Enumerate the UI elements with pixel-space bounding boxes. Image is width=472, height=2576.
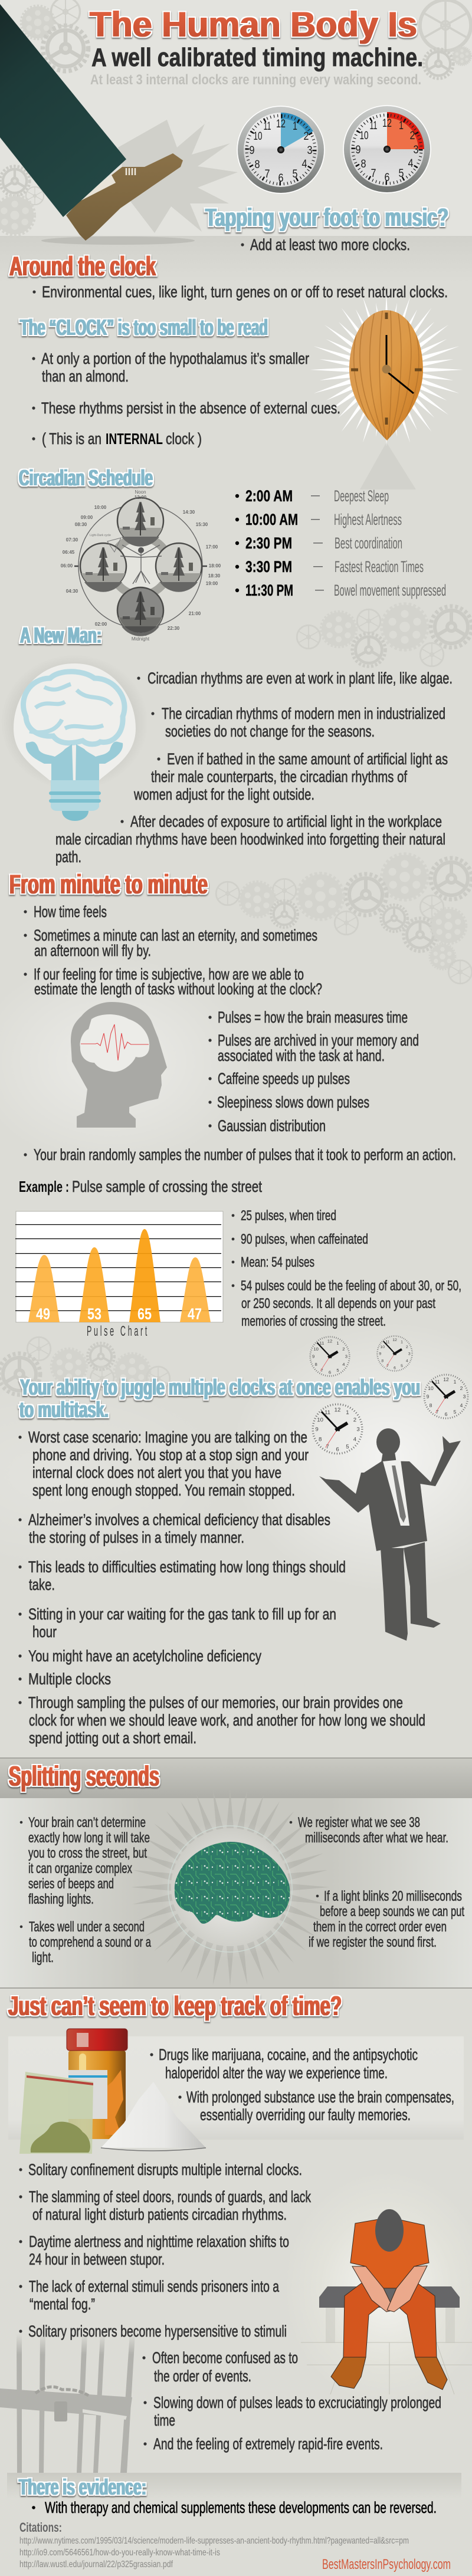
text: subjective time: If our feeling for time is subjective, how are we able to [34, 965, 304, 983]
illustration: brain light bulb [1, 655, 148, 821]
clock: blue two-hour dial: 4 [302, 158, 307, 170]
text: brain cant determine: series of beeps and [28, 1876, 114, 1892]
chart: pulse chart: 47 [188, 1305, 202, 1323]
text: worst case scenario: spent long enough stopped. You remain stopped. [32, 1481, 295, 1499]
list: circadian times [235, 487, 446, 599]
list: pulse stats [232, 1208, 461, 1329]
text: internal clock: INTERNAL [106, 430, 163, 448]
small clock 4: 10 [317, 1417, 323, 1424]
small clock 4 [313, 1404, 362, 1454]
chart: circadian diagram: 09:00 [81, 515, 93, 520]
text: alzheimers [18, 1511, 330, 1546]
text: hypothalamus: At only a portion of the hypothalamus it’s smaller [41, 350, 309, 367]
small clock 4: 12 [335, 1407, 340, 1414]
almond clock with rays [310, 293, 463, 489]
chart: circadian diagram: 15:30 [196, 522, 208, 527]
small clock 4: 2 [353, 1417, 356, 1424]
text: confused order: Often become confused as to [152, 2349, 298, 2367]
list: pulses [208, 1008, 419, 1135]
small clock 2: 10 [380, 1345, 385, 1349]
small clock 2: 11 [385, 1340, 390, 1344]
heading: juggle multiple clocks [19, 1375, 420, 1422]
text: sometimes a minute: Sometimes a minute can last an eternity, and sometimes [34, 926, 317, 944]
text: under a second: to comprehend a sound or a [29, 1934, 151, 1950]
heading: clock too small: The “CLOCK” is too small to be read [20, 316, 268, 340]
text: difficulties: take. [29, 1576, 55, 1593]
text: brain cant determine: you to cross the street, but [28, 1845, 147, 1861]
chart: circadian diagram [61, 489, 221, 642]
text: workplace exposure: path. [55, 848, 81, 866]
clock: blue two-hour dial: 1 [293, 120, 297, 133]
text: subjective time [24, 965, 322, 998]
small clock 2: 1 [401, 1340, 403, 1344]
text: artificial light [133, 750, 448, 803]
heading: around the clock: Around the clock [9, 251, 156, 281]
heading: there is evidence: There is evidence: [19, 2475, 146, 2500]
small clock 1: 5 [336, 1368, 339, 1373]
panel: drugs [8, 2036, 464, 2140]
list: pulses: Sleepiness slows down pulses [217, 1093, 369, 1111]
text: gas tank: Sitting in your car waiting for the gas tank to fill up for an [28, 1605, 336, 1623]
chart: circadian diagram: 00:00 [135, 632, 148, 637]
chart: circadian diagram: 07:30 [66, 537, 78, 543]
text: artificial light: women adjust for the light outside. [133, 786, 314, 803]
text: sometimes a minute [24, 926, 317, 960]
text: solitary confinement: Solitary confinement disrupts multiple internal clocks. [28, 2161, 302, 2179]
text: hypersensitive: Solitary prisoners become hypersensitive to stimuli [28, 2322, 287, 2340]
small clock 3: 1 [454, 1379, 457, 1385]
text: subjective time: estimate the length of tasks without looking at the clock? [34, 980, 322, 998]
text: worst case scenario: Worst case scenario: Imagine you are talking on the [28, 1428, 307, 1446]
chart: circadian diagram: 02:00 [95, 622, 107, 627]
small clock 3: 5 [454, 1409, 457, 1415]
list: circadian times: 10:00 AM [245, 511, 298, 528]
list: pulses: Caffeine speeds up pulses [218, 1070, 350, 1087]
chart: circadian diagram: 06:00 [61, 563, 73, 569]
small clock 1: 12 [327, 1339, 332, 1344]
clock: red three-hour dial: 3 [413, 144, 419, 156]
text: modern men [151, 705, 445, 740]
text: alzheimers: the storing of pulses in a timely manner. [29, 1529, 244, 1546]
clock: blue two-hour dial: 6 [278, 172, 283, 185]
text: multiple clocks: Multiple clocks [28, 1670, 111, 1688]
text: slowing pulses: time [154, 2411, 175, 2429]
small clock 2: 5 [401, 1364, 403, 1368]
clock: red three-hour dial [343, 106, 431, 193]
illustration: businessman silhouette [319, 1428, 461, 1641]
clock: red three-hour dial: 11 [369, 120, 378, 132]
text: under a second [20, 1919, 151, 1966]
text: confused order: the order of events. [154, 2367, 251, 2385]
rays around brain [131, 1788, 329, 1986]
text: difficulties [18, 1558, 346, 1593]
small clock 3: 9 [427, 1394, 430, 1399]
list: pulse stats: 90 pulses, when caffeinated [241, 1231, 368, 1247]
text: worst case scenario [18, 1428, 309, 1499]
chart: circadian diagram: 18:30 [208, 573, 221, 579]
text: steel doors [19, 2188, 312, 2223]
clock: blue two-hour dial: 10 [254, 130, 262, 143]
small clock 3: 10 [428, 1385, 434, 1391]
small clock 3: 12 [443, 1376, 449, 1382]
chart: circadian diagram: Midnight [132, 636, 150, 642]
clock: blue two-hour dial [237, 106, 324, 193]
small clock 4: 4 [353, 1436, 357, 1443]
clock: red three-hour dial: 5 [399, 167, 404, 180]
small clock 3: 4 [460, 1402, 463, 1408]
text: sampling pulses [18, 1694, 425, 1747]
small clock 2: 8 [381, 1359, 384, 1363]
text: example: Example : [19, 1178, 69, 1195]
small clock 2: 9 [379, 1352, 381, 1356]
text: how time feels: How time feels [34, 903, 107, 921]
text: mental fog: The lack of external stimuli sends prisoners into a [29, 2278, 279, 2295]
clock: blue two-hour dial: 8 [255, 159, 260, 171]
small clock 1: 11 [320, 1340, 324, 1346]
small clock 4: 9 [315, 1426, 319, 1432]
text: confused order [142, 2349, 298, 2385]
panel: splitting seconds [0, 1757, 472, 1989]
small clock 4: 11 [324, 1409, 330, 1416]
clock: blue two-hour dial: 12 [276, 118, 286, 130]
small clock 1: 9 [312, 1354, 314, 1359]
text: brain cant determine: it can organize complex [28, 1861, 132, 1877]
text: worst case scenario: internal clock does not alert you that you have [32, 1464, 281, 1481]
text: example [19, 1178, 262, 1195]
small clock 3: 8 [430, 1402, 432, 1408]
text: internal clock: ( This is an [42, 430, 101, 448]
text: 38 milliseconds: We register what we see 38 [298, 1815, 420, 1831]
citations: http://law.wustl.edu/journal/22/p325grassian.pdf [19, 2559, 173, 2570]
text: acetylcholine: You might have an acetylcholine deficiency [28, 1647, 262, 1665]
chart: circadian diagram: 22:30 [168, 626, 180, 631]
text: steel doors: The slamming of steel doors, rounds of guards, and lack [29, 2188, 312, 2206]
small clock 4: 3 [356, 1426, 360, 1432]
clock: blue two-hour dial: 7 [264, 168, 270, 180]
list: pulses: associated with the task at hand. [218, 1047, 385, 1064]
small clock 4: 8 [319, 1436, 322, 1443]
small clock 2: 7 [386, 1364, 389, 1368]
text: mental fog: “mental fog.” [30, 2295, 95, 2313]
small clock 2: 6 [394, 1366, 396, 1370]
citations: Citations: [19, 2520, 62, 2535]
text: internal clock: clock ) [166, 430, 202, 448]
clock: red three-hour dial: 9 [355, 144, 361, 156]
citations: http://io9.com/5646561/how-do-you-really-know-what-time-it-is [19, 2548, 220, 2558]
text: mental fog [19, 2278, 279, 2313]
text: drugs alter time [150, 2046, 418, 2082]
clock: red three-hour dial: 10 [360, 130, 368, 142]
clock: red three-hour dial: 12 [382, 117, 392, 130]
starburst behind foot [118, 120, 238, 233]
list: pulse stats: memories of crossing the street. [241, 1313, 386, 1329]
text: under a second: light. [32, 1950, 54, 1966]
list: circadian times: 11:30 PM [245, 581, 293, 599]
icon: circuit brain [175, 1842, 290, 1924]
small clock 1: 3 [345, 1354, 348, 1359]
text: gas tank: hour [32, 1623, 57, 1641]
illustration: drugs [19, 2029, 206, 2154]
small clock 2: 4 [406, 1359, 408, 1363]
small clock 4: 7 [326, 1444, 329, 1450]
clock: blue two-hour dial: 11 [263, 120, 271, 133]
small clock 3 [424, 1375, 468, 1418]
small clock 2: 3 [408, 1352, 411, 1356]
text: difficulties: This leads to difficulties estimating how long things should [28, 1558, 346, 1576]
clock: blue two-hour dial: 3 [307, 144, 313, 157]
illustration: tapping foot [0, 4, 183, 241]
small clock 3: 6 [445, 1411, 448, 1417]
chart: circadian diagram: Noon [135, 489, 146, 495]
chart: circadian diagram: 10:00 [94, 505, 107, 510]
text: prolonged use [178, 2088, 454, 2124]
list: circadian times: Highest Alertness [334, 511, 402, 528]
text: hypothalamus [32, 350, 309, 385]
text: worst case scenario: phone and driving. You stop at a stop sign and your [32, 1446, 309, 1464]
small clock 2: 2 [406, 1345, 408, 1349]
text: alzheimers: Alzheimer’s involves a chemical deficiency that disables [28, 1511, 330, 1529]
text: 38 milliseconds [290, 1815, 448, 1846]
list: pulse stats: Mean: 54 pulses [241, 1254, 314, 1270]
small clock 3: 7 [436, 1409, 439, 1415]
list: circadian times: 2:30 PM [245, 534, 292, 552]
chart: pulse chart [15, 1211, 223, 1339]
small clock 1: 7 [320, 1368, 323, 1373]
list: pulses: Gaussian distribution [218, 1117, 326, 1135]
chart: pulse chart: Pulse Chart [87, 1323, 149, 1339]
small clock 2 [377, 1336, 412, 1371]
chart: circadian diagram: 21:00 [189, 611, 201, 616]
chart: circadian diagram: 17:00 [206, 544, 218, 550]
chart: pulse chart: 49 [36, 1305, 50, 1323]
clock: red three-hour dial: 8 [361, 158, 366, 170]
text: brain cant determine [20, 1815, 150, 1907]
text: example: Pulse sample of crossing the street [72, 1178, 262, 1195]
citations [19, 2520, 409, 2570]
small clock 4: 1 [346, 1409, 349, 1416]
text: brain cant determine: exactly how long it will take [28, 1830, 150, 1846]
clock: red three-hour dial: 4 [408, 157, 414, 170]
chart: pulse chart: 53 [87, 1305, 101, 1323]
clock: blue two-hour dial: 9 [249, 144, 255, 157]
chart: circadian diagram: Light-Dark cycle [90, 534, 111, 537]
clock: red three-hour dial: 6 [385, 172, 389, 184]
small clock 1: 1 [336, 1340, 339, 1346]
clock: red three-hour dial: 2 [409, 130, 415, 142]
background gears [0, 0, 472, 1395]
text: modern men: societies do not change for the seasons. [165, 722, 375, 740]
illustration: head with pulse [71, 1002, 167, 1128]
heading: from minute to minute: From minute to minute [9, 869, 208, 899]
text: daytime alertness: 24 hour in between stupor. [29, 2250, 165, 2268]
list: circadian times: 3:30 PM [245, 558, 292, 576]
text: drugs alter time: haloperidol alter the way we experience time. [165, 2064, 388, 2082]
heading: circadian schedule: Circadian Schedule [19, 466, 153, 491]
text: daytime alertness [19, 2233, 289, 2268]
text: add clocks: Add at least two more clocks. [250, 236, 410, 254]
text: workplace exposure [55, 813, 445, 866]
text: brain cant determine: Your brain can’t determine [28, 1815, 146, 1831]
text: daytime alertness: Daytime alertness and nighttime relaxation shifts to [29, 2233, 289, 2250]
heading: juggle multiple clocks: to multitask. [19, 1398, 109, 1422]
text: rapid fire: And the feeling of extremely rapid-fire events. [153, 2435, 383, 2453]
list: circadian times: 2:00 AM [245, 487, 293, 505]
small clock 1: 2 [342, 1346, 345, 1352]
chart: circadian diagram: 14:30 [183, 510, 195, 515]
illustration: locked prison gate [0, 2334, 135, 2473]
text: steel doors: of natural light disturb patients circadian rhythms. [32, 2206, 287, 2223]
title: The Human Body Is [90, 5, 417, 44]
text: under a second: Takes well under a second [29, 1919, 145, 1935]
panel: evidence band [7, 2473, 461, 2499]
chart: circadian diagram: 08:30 [75, 522, 87, 527]
text: how time feels [24, 903, 107, 921]
clock: blue two-hour dial: 5 [293, 168, 297, 180]
text: 20 milliseconds [309, 1888, 464, 1950]
small clock 1 [310, 1337, 349, 1376]
text: sampling pulses: spend jotting out a short email. [29, 1729, 196, 1747]
chart: pulse chart: 65 [137, 1305, 152, 1323]
list: pulse stats: 25 pulses, when tired [241, 1208, 336, 1224]
chart: circadian diagram: 12:00 [135, 495, 147, 500]
small clock 3: 2 [460, 1385, 463, 1391]
text: slowing pulses [143, 2394, 441, 2429]
small clock 2: 12 [392, 1338, 397, 1342]
text: hypothalamus: than an almond. [42, 367, 129, 385]
small clock 3: 3 [463, 1394, 466, 1399]
text: internal clock [32, 430, 202, 448]
heading: splitting seconds: Splitting seconds [9, 1761, 159, 1792]
clock: red three-hour dial: 7 [371, 167, 376, 180]
clock: red three-hour dial: 1 [399, 120, 404, 132]
list: circadian times: Best coordination [335, 534, 402, 552]
chart: circadian diagram: 06:45 [63, 550, 75, 555]
small clock 3: 11 [435, 1379, 440, 1385]
small clock 4: 6 [336, 1446, 339, 1453]
text: rhythms persist: These rhythms persist in the absence of external cues. [41, 399, 340, 417]
text: gas tank [18, 1605, 336, 1641]
illustration: prisoner on bench [283, 2170, 472, 2406]
small clock 1: 10 [313, 1346, 319, 1352]
chart: circadian diagram: 19:00 [206, 581, 218, 586]
list: circadian times: Deepest Sleep [334, 487, 389, 505]
small clock 4: 5 [346, 1444, 349, 1450]
small clock 1: 4 [342, 1362, 345, 1367]
text: brain cant determine: flashing lights. [28, 1891, 94, 1907]
text: sometimes a minute: an afternoon will fly by. [34, 942, 151, 960]
chart: circadian diagram: 18:00 [209, 563, 221, 569]
small clock 1: 6 [329, 1370, 331, 1375]
small clock 1: 8 [314, 1362, 317, 1367]
shoe shadow [41, 236, 195, 245]
clock: blue two-hour dial: 2 [303, 130, 309, 143]
chart: circadian diagram: 04:30 [66, 589, 78, 594]
heading: a new man: A New Man: [20, 623, 101, 648]
